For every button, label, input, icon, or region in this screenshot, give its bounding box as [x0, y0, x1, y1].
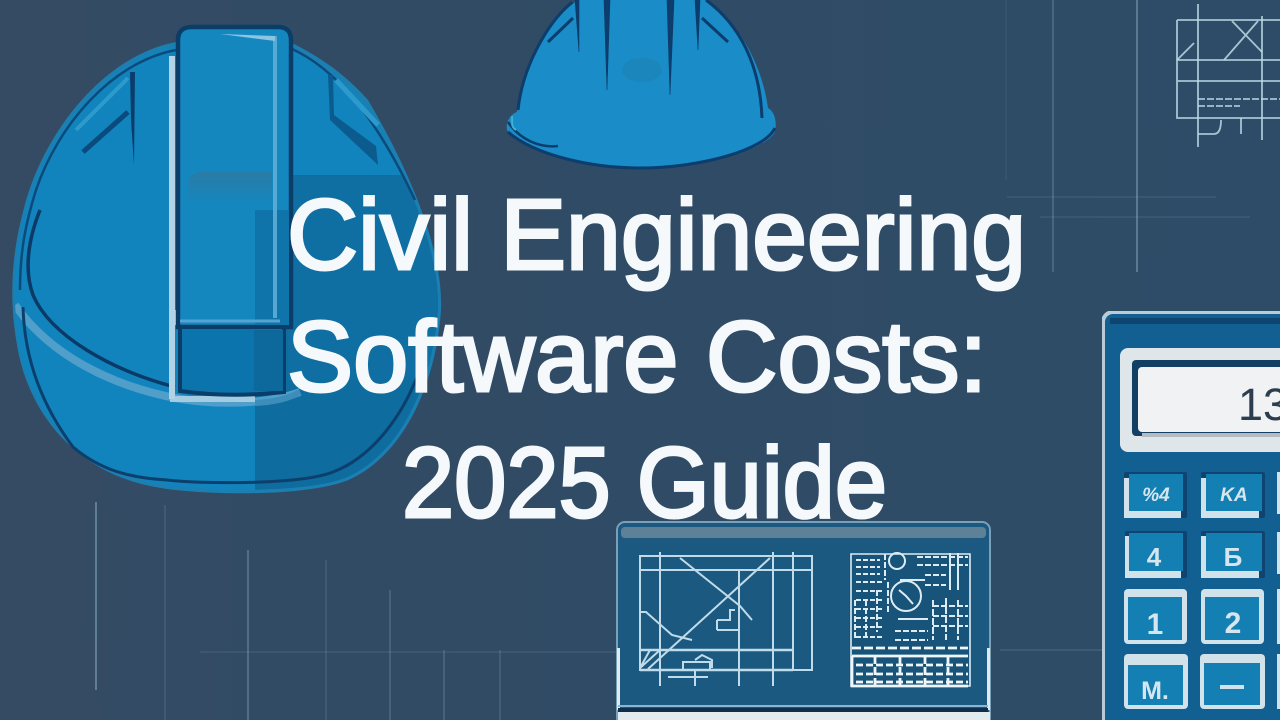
icon: small hard hat [507, 0, 776, 169]
brim inner line [28, 210, 175, 387]
brim light band [15, 305, 300, 403]
icon: blueprint sketch top right [1177, 4, 1280, 147]
chart: building section sketch [640, 552, 812, 686]
calculator display [1120, 348, 1280, 452]
key row 1 [1124, 472, 1280, 518]
panel: CAD monitor [617, 522, 990, 720]
key row 4: M. [1141, 677, 1169, 705]
helmet outline [20, 50, 176, 290]
key row 1: KA [1220, 485, 1248, 506]
title: 2025 Guide [402, 427, 887, 539]
key row 1: %4 [1142, 485, 1170, 506]
shaded recess on column [188, 172, 272, 320]
monitor title bar [621, 527, 986, 538]
chart: dense plan pattern [849, 553, 970, 688]
title: Civil Engineering [287, 179, 1026, 291]
key row 3: 1 [1147, 608, 1163, 641]
key row 4 [1124, 654, 1280, 709]
title: Software Costs: [287, 301, 987, 413]
title [287, 179, 1026, 539]
white strip [169, 56, 175, 399]
ribs [130, 72, 135, 165]
key row 3: 2 [1225, 607, 1241, 640]
key row 2: 4 [1147, 542, 1162, 572]
icon: large hard hat [12, 27, 455, 500]
icon: calculator [1103, 312, 1280, 720]
key row 3 [1124, 589, 1280, 644]
darker right half [255, 329, 420, 490]
calculator keys [1124, 472, 1280, 709]
key row 2 [1125, 531, 1280, 578]
center column [178, 27, 291, 327]
column base [180, 327, 284, 395]
key row 2: Б [1224, 542, 1242, 572]
